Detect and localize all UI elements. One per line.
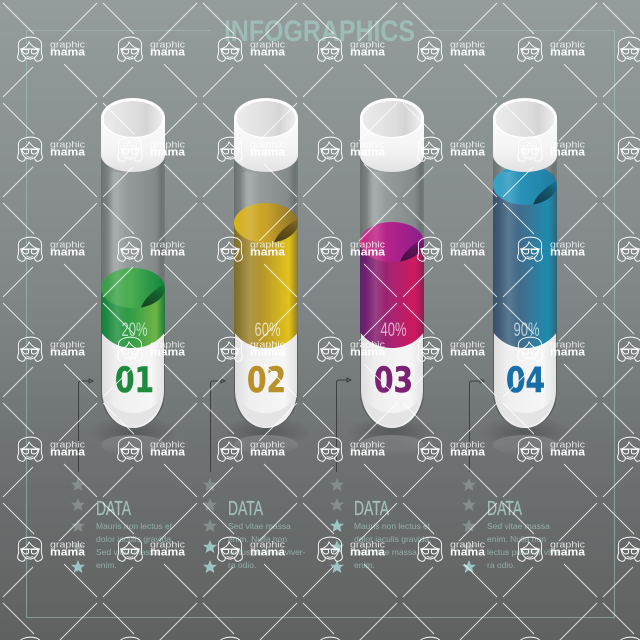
- tube 4: blue 90%: [479, 98, 571, 455]
- glass highlight: [107, 172, 127, 348]
- glass body: [234, 150, 298, 400]
- cap: [493, 98, 557, 172]
- text block 2: lectus pulvinar viver-: [228, 547, 306, 557]
- number: 01: [115, 361, 154, 401]
- tube 2: yellow 60%: [220, 98, 312, 455]
- text block 4: Sed vitae massa: [487, 521, 550, 531]
- number: 02: [247, 361, 286, 401]
- number: 03: [374, 361, 413, 401]
- capsule bottom: [493, 330, 557, 428]
- star rating 3: [330, 478, 344, 573]
- glass highlight: [499, 172, 519, 348]
- arrow: connector 3: [336, 378, 351, 472]
- glass body: [360, 150, 424, 400]
- text block 2: DATA: [228, 498, 263, 520]
- number: 04: [506, 361, 545, 401]
- text block 1: Mauris non lectus et: [96, 521, 173, 531]
- text block 4: lectus pulvinar viver-: [487, 547, 565, 557]
- tube 1: green 20%: [87, 98, 179, 455]
- arrow: connector 1: [78, 379, 93, 472]
- cap: [234, 98, 298, 172]
- percentage: 90%: [514, 320, 540, 341]
- glass highlight: [240, 172, 260, 348]
- text block 3: Mauris non lectus et: [354, 521, 431, 531]
- star rating 4: [462, 478, 476, 573]
- percentage: 40%: [380, 320, 407, 341]
- capsule bottom: [360, 330, 424, 428]
- floor shadow: [220, 416, 312, 455]
- text block 4: DATA: [487, 498, 522, 520]
- text block 2: Sed vitae massa: [228, 521, 291, 531]
- floor shadow: [479, 416, 571, 455]
- arrow: connector 2: [210, 379, 225, 472]
- text block 3: dolor iaculis gravida.: [354, 534, 431, 544]
- cap: [360, 98, 424, 172]
- text block 2: [228, 498, 306, 570]
- text block 2: ra odio.: [228, 560, 256, 570]
- liquid: [360, 222, 424, 348]
- glass highlight: [366, 172, 386, 348]
- text block 1: DATA: [96, 498, 131, 520]
- tube 3: magenta 40%: [346, 98, 438, 455]
- percentage: 20%: [122, 320, 148, 341]
- text block 3: [354, 498, 431, 570]
- text block 4: ra odio.: [487, 560, 515, 570]
- text block 4: enim. Nulla non: [487, 534, 546, 544]
- text block 2: enim. Nulla non: [228, 534, 287, 544]
- star rating 2: [203, 478, 217, 573]
- text block 1: enim.: [96, 560, 117, 570]
- title: INFOGRAPHICS: [224, 15, 415, 48]
- text block 1: [96, 498, 173, 570]
- liquid: [101, 268, 165, 348]
- text block 1: dolor iaculis gravida.: [96, 534, 173, 544]
- text block 1: Sed vitae massa: [96, 547, 159, 557]
- arrow: connector 4: [470, 379, 484, 472]
- text block 3: enim.: [354, 560, 375, 570]
- capsule bottom: [234, 330, 298, 428]
- text block 3: Sed vitae massa: [354, 547, 417, 557]
- liquid: [493, 165, 557, 348]
- glass body: [493, 150, 557, 400]
- floor shadow: [346, 416, 438, 455]
- text block 3: DATA: [354, 498, 389, 520]
- glass body: [101, 150, 165, 400]
- percentage: 60%: [254, 320, 281, 341]
- cap: [101, 98, 165, 172]
- liquid: [234, 203, 298, 348]
- floor shadow: [87, 416, 179, 455]
- capsule bottom: [101, 330, 165, 428]
- star rating 1: [71, 478, 85, 573]
- text block 4: [487, 498, 565, 570]
